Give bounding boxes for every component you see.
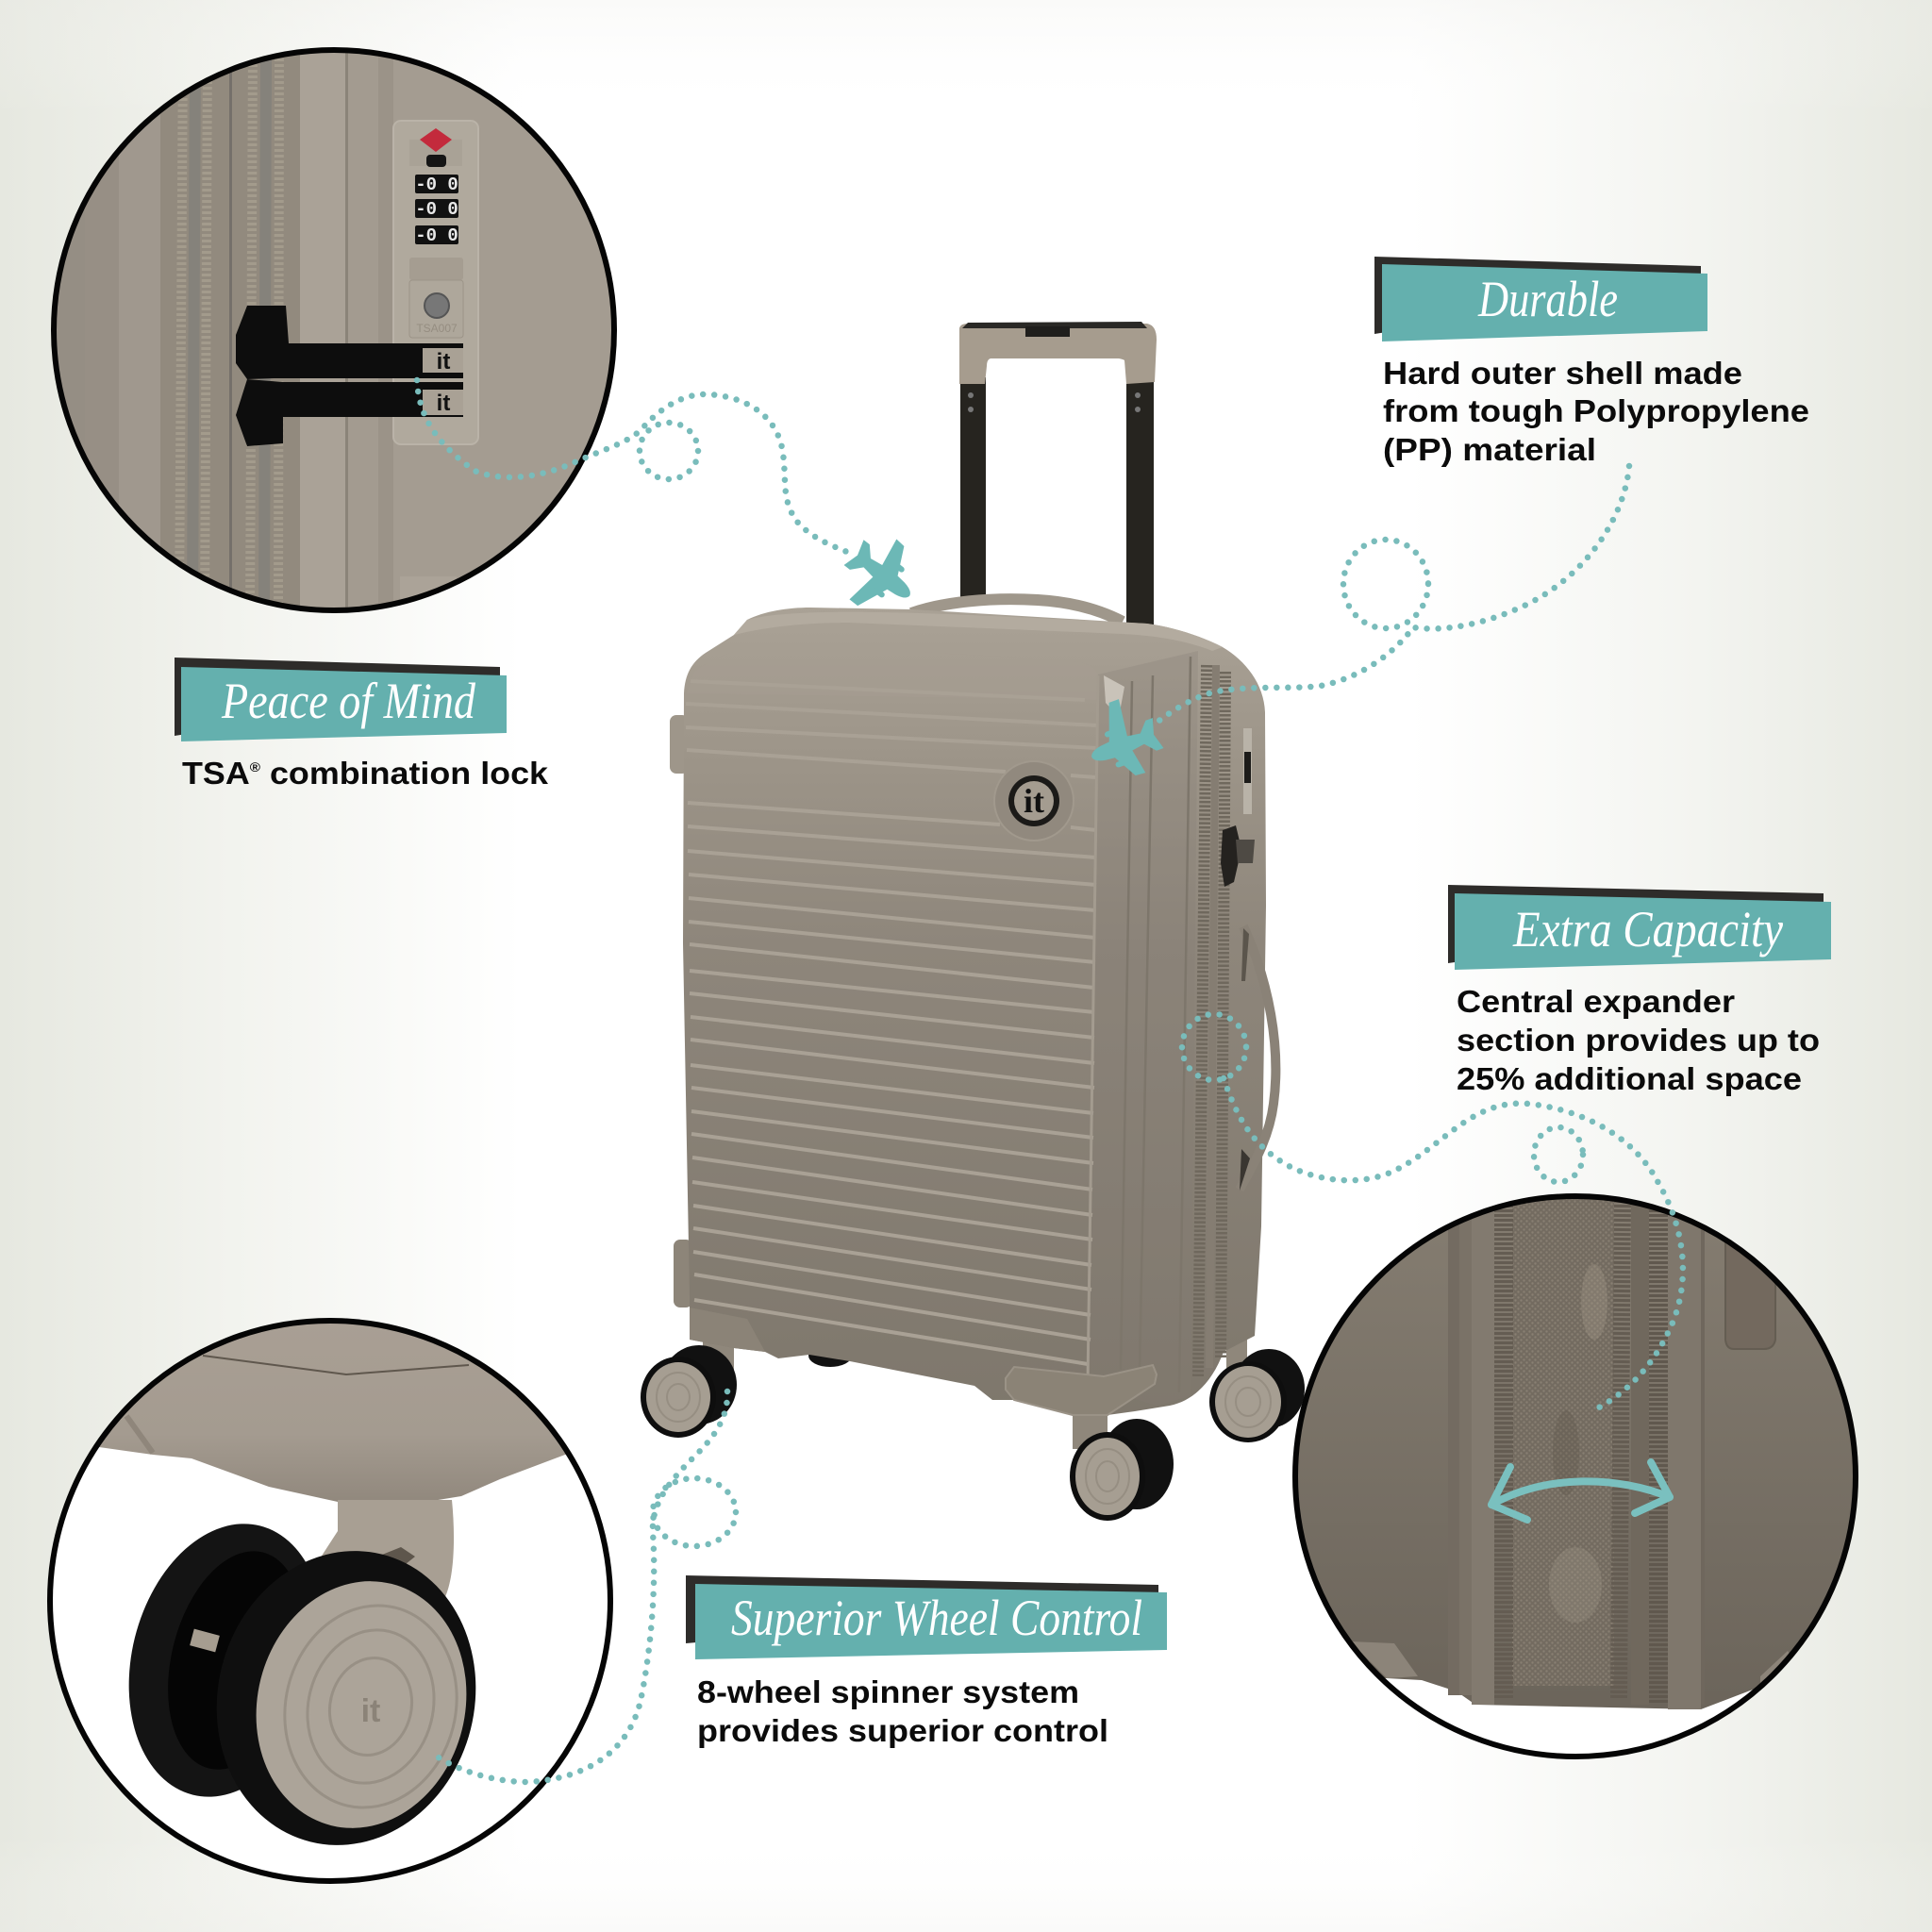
side panel shading bbox=[1088, 651, 1198, 1406]
text: Durable description: Hard outer shell made bbox=[1383, 356, 1742, 391]
side handle bbox=[1240, 926, 1275, 1191]
zipper pulls bbox=[236, 306, 463, 379]
banner: Peace of Mind: Peace of Mind bbox=[221, 673, 476, 729]
callout circle: combination lock: it bbox=[437, 349, 450, 375]
front face ribs bbox=[686, 681, 1098, 1364]
banner: Superior Wheel Control bbox=[686, 1575, 1167, 1659]
combination dials: -0 0 bbox=[415, 225, 458, 246]
side panel grooves bbox=[1121, 657, 1191, 1392]
rim highlight bbox=[734, 612, 1223, 651]
plane icon 2 bbox=[1076, 691, 1170, 789]
corner tiles bbox=[1350, 1641, 1418, 1678]
text: Durable description: (PP) material bbox=[1383, 432, 1596, 467]
text: Peace of Mind description: combination lock bbox=[260, 756, 549, 791]
banner: Durable: Durable bbox=[1477, 271, 1618, 327]
TSA diamond bbox=[420, 128, 452, 152]
stem bbox=[321, 1500, 454, 1596]
shell base bbox=[99, 1324, 566, 1502]
dotted flight path: wheels bbox=[430, 1391, 736, 1782]
callout circle: wheel close-up bbox=[47, 1302, 623, 1881]
zipper fabric bbox=[160, 47, 300, 613]
banner: Durable bbox=[1374, 257, 1707, 341]
shell bbox=[1283, 1189, 1868, 1709]
outer wheel bbox=[217, 1551, 475, 1845]
text: Superior Wheel Control description: provides superior control bbox=[697, 1713, 1108, 1748]
rear hidden wheel bbox=[808, 1344, 852, 1367]
side zipper pulls bbox=[1221, 825, 1255, 887]
callout circle: combination lock: it bbox=[437, 391, 450, 416]
banner: Peace of Mind bbox=[175, 658, 507, 741]
expander zippers bbox=[1198, 665, 1225, 1377]
feature: Peace of Mind bbox=[175, 658, 549, 791]
banner: Superior Wheel Control: Superior Wheel Control bbox=[731, 1590, 1142, 1646]
dotted flight path: lock to plane bbox=[417, 380, 852, 554]
callout circle: combination lock bbox=[47, 47, 623, 614]
text: Extra Capacity description: Central expander bbox=[1457, 984, 1735, 1019]
combination dials: -0 0 bbox=[415, 199, 458, 220]
text: Peace of Mind description: TSA bbox=[182, 756, 244, 791]
it logo badge bbox=[1008, 775, 1059, 826]
combination dials bbox=[415, 175, 458, 246]
wheel stems bbox=[703, 1335, 1247, 1449]
text: Extra Capacity description: 25% additional space bbox=[1457, 1061, 1802, 1096]
feature: Extra Capacity bbox=[1448, 885, 1831, 1096]
wheel rings bbox=[283, 1604, 458, 1809]
combination dials: -0 0 bbox=[415, 175, 458, 195]
text: Superior Wheel Control description: 8-wheel spinner system bbox=[697, 1674, 1079, 1709]
telescopic handle bbox=[959, 322, 1157, 625]
left bottom corner bbox=[690, 1307, 765, 1352]
corner glare bbox=[1104, 675, 1124, 717]
callout circle: combination lock: TSA007 bbox=[416, 322, 458, 335]
expansion arrow bbox=[1491, 1462, 1670, 1520]
logo recess bbox=[994, 761, 1074, 841]
plane icon 1 bbox=[829, 524, 932, 627]
it logo badge: it bbox=[1024, 782, 1044, 820]
wheel: front right bbox=[1070, 1419, 1174, 1521]
zippers bbox=[1504, 1195, 1658, 1703]
callout circle: wheel close-up: it bbox=[361, 1693, 380, 1729]
carry handle bbox=[911, 599, 1123, 622]
dotted flight path: expander bbox=[1182, 1014, 1683, 1407]
text: Extra Capacity description bbox=[1457, 984, 1820, 1096]
left side stubs bbox=[670, 715, 689, 774]
front face right edge bbox=[1088, 675, 1098, 1383]
text: Durable description bbox=[1383, 356, 1809, 467]
text: Durable description: from tough Polypropylene bbox=[1383, 393, 1809, 428]
side tab bbox=[1725, 1226, 1775, 1349]
suitcase shell bbox=[683, 608, 1266, 1415]
feature: Durable bbox=[1374, 257, 1809, 467]
banner: Extra Capacity: Extra Capacity bbox=[1512, 901, 1783, 958]
lock plate bbox=[393, 121, 478, 444]
wheel: back right bbox=[1209, 1349, 1305, 1442]
inner wheel bbox=[128, 1524, 306, 1797]
callout circle: expander section bbox=[1283, 1189, 1868, 1757]
text: Superior Wheel Control description bbox=[697, 1674, 1108, 1748]
dotted flight path: durable to plane bbox=[1153, 466, 1629, 725]
text: Extra Capacity description: section provides up to bbox=[1457, 1023, 1820, 1058]
banner: Extra Capacity bbox=[1448, 885, 1831, 970]
suitcase product photo bbox=[641, 322, 1305, 1521]
text: Peace of Mind description: ® bbox=[250, 759, 261, 774]
TSA label on side bbox=[1243, 728, 1252, 814]
front face top panel bbox=[687, 644, 1098, 700]
feature: Superior Wheel Control bbox=[686, 1575, 1167, 1748]
mesh expansion panel bbox=[1512, 1195, 1614, 1686]
key cylinder bbox=[425, 293, 449, 318]
front bottom corner bbox=[1006, 1365, 1157, 1415]
wheel: front left bbox=[641, 1345, 737, 1438]
